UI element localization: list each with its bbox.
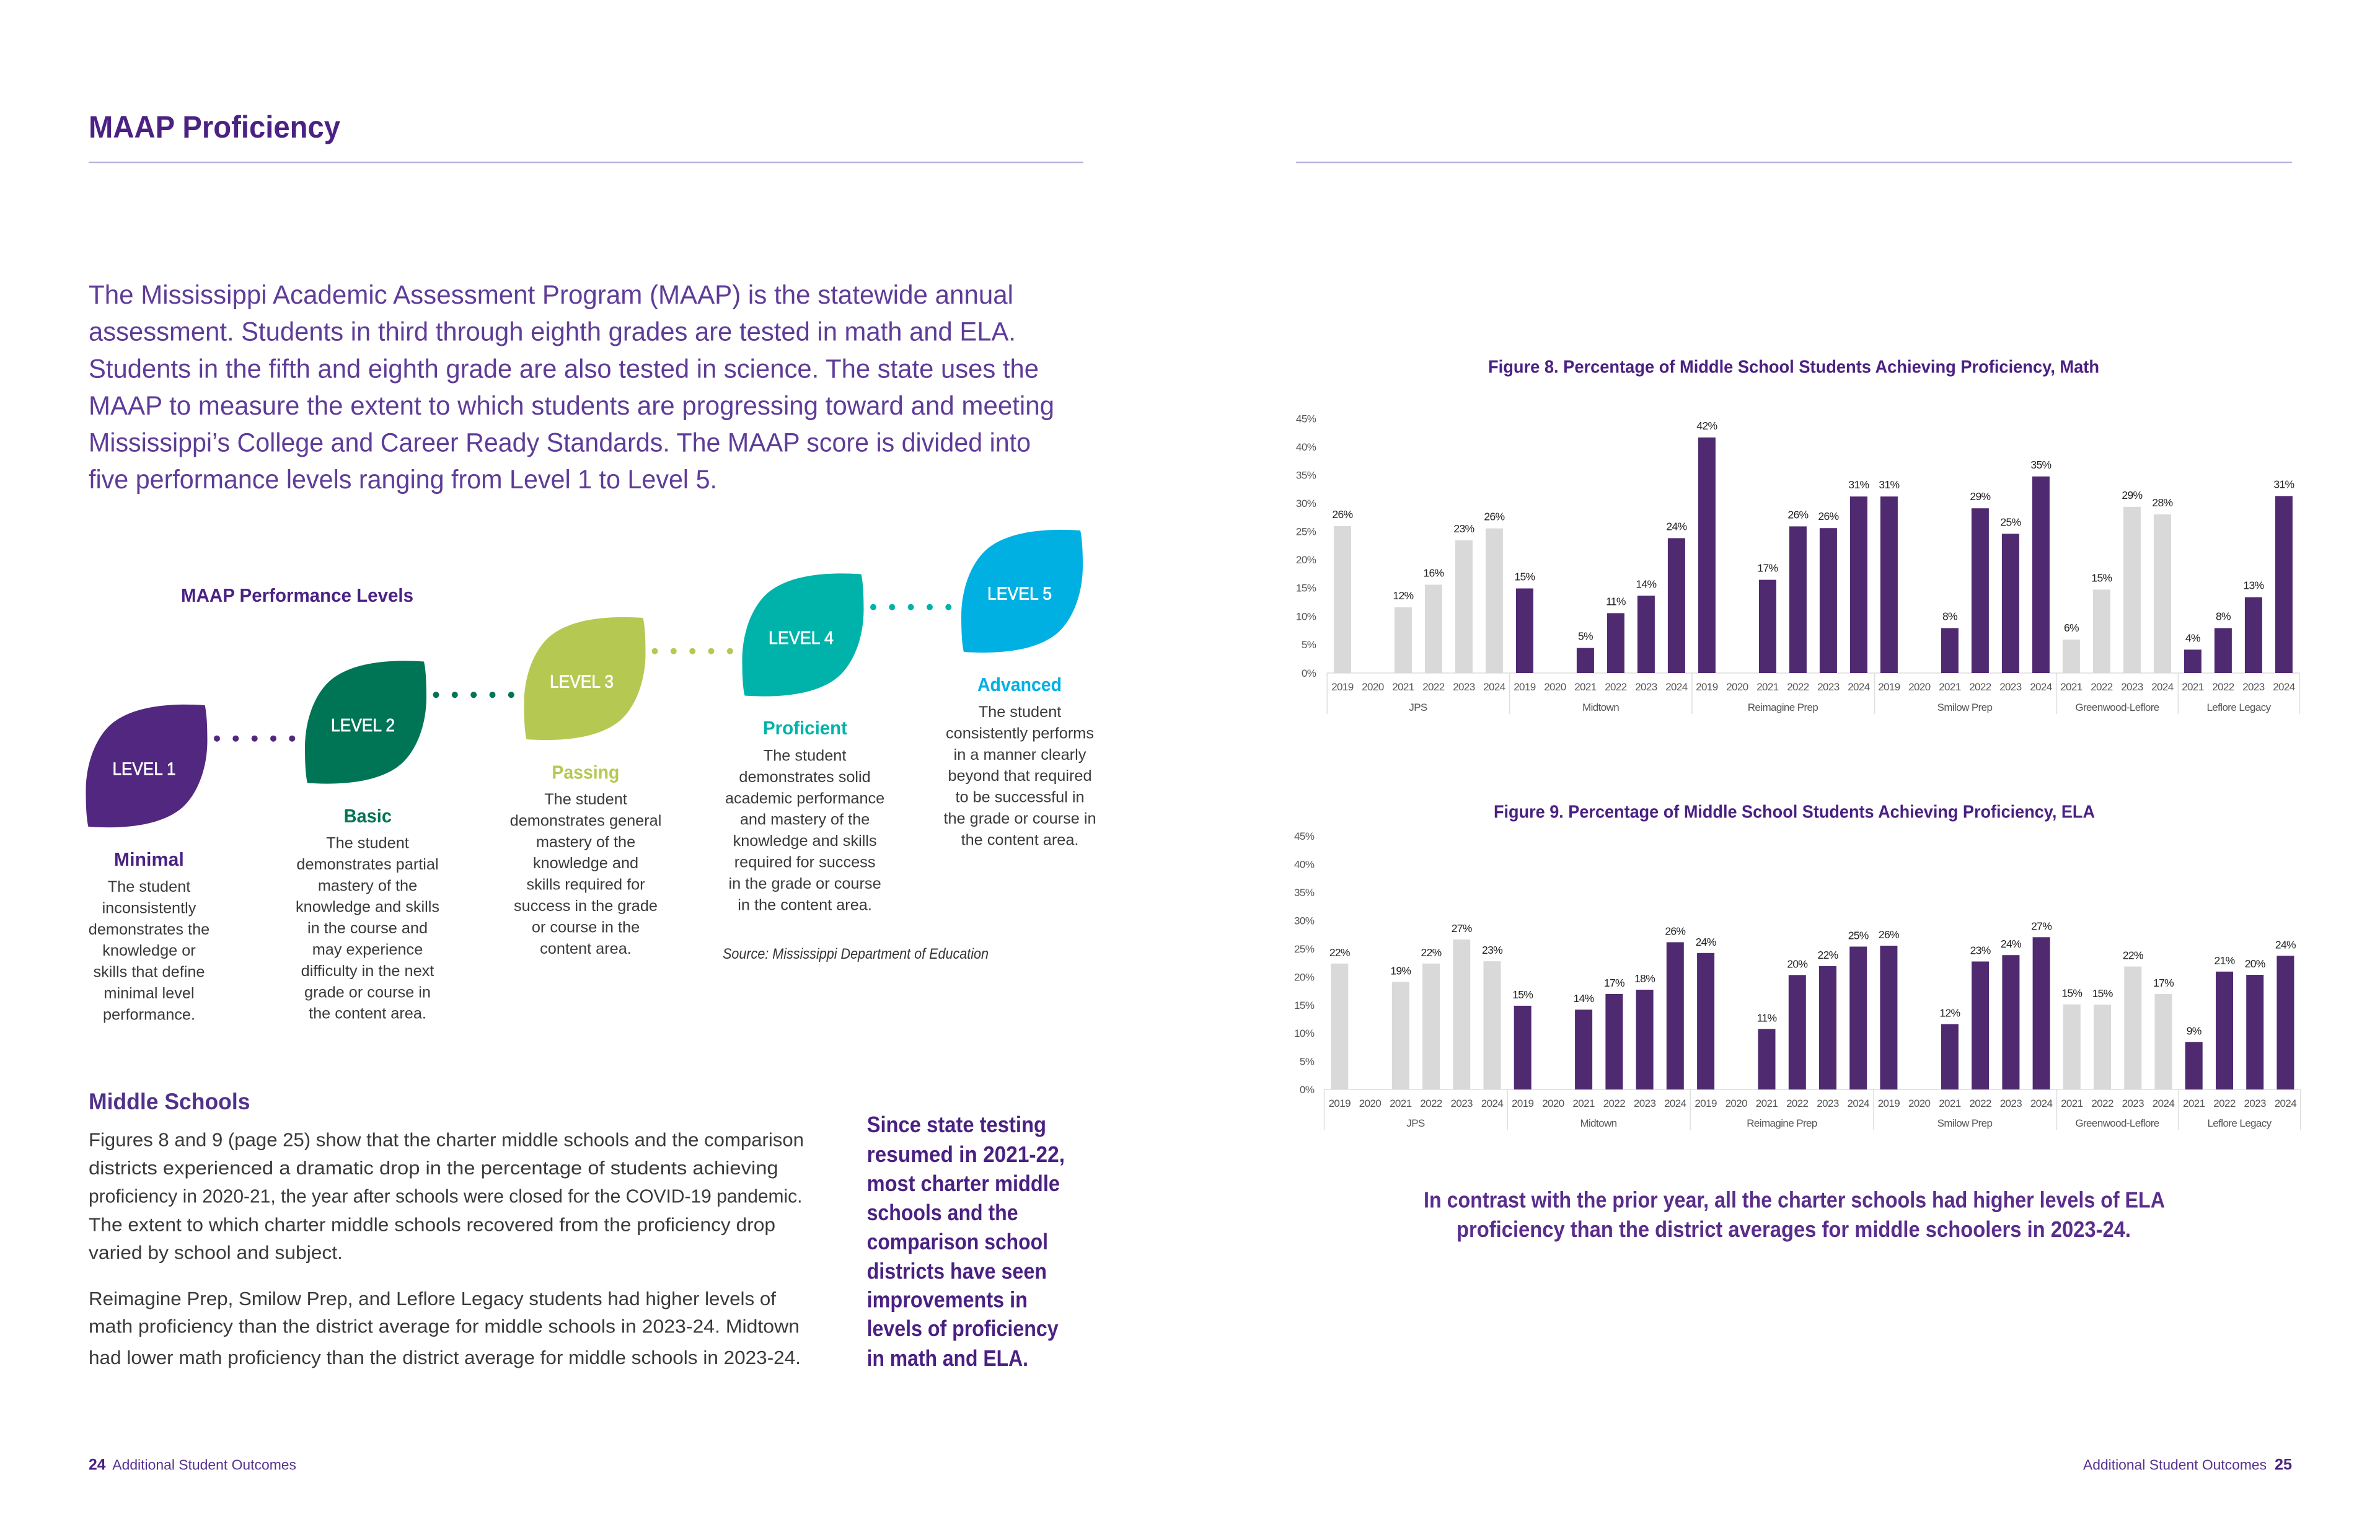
group: Midtown: 15%: [1514, 570, 1535, 583]
level 4 description: [725, 747, 884, 913]
level 4 name: Proficient: [763, 717, 847, 739]
footer: page 25: 25: [2275, 1456, 2292, 1474]
level 4 description: required for success: [734, 854, 875, 871]
dotted connector 3 to 4: [652, 648, 733, 654]
group: Smilow Prep: Smilow Prep: [1937, 1117, 1993, 1129]
intro paragraph: [89, 280, 1054, 495]
group: JPS: 12%: [1393, 589, 1413, 602]
group: Greenwood-Leflore: 17%: [2153, 977, 2174, 989]
callout: ELA contrast with prior year: In contrast with the prior year, all the charter schools had higher levels of ELA: [1424, 1187, 2165, 1212]
y axis labels: 45%: [1296, 413, 1316, 425]
group: Midtown: 2024: [1665, 681, 1688, 693]
group: Reimagine Prep: [1695, 930, 1869, 1129]
group: Reimagine Prep: 31%: [1848, 478, 1869, 491]
level 5 description: consistently performs: [946, 724, 1094, 742]
group: Greenwood-Leflore: [2061, 949, 2174, 1129]
group: JPS: JPS: [1409, 702, 1427, 713]
icon: level 3 leaf: [524, 617, 646, 740]
group: JPS: 2024: [1483, 681, 1505, 693]
body text: middle schools paragraph 1: varied by school and subject.: [89, 1241, 343, 1263]
group: Leflore Legacy: 2021: [2183, 1098, 2205, 1109]
level 5 description: the content area.: [961, 831, 1078, 848]
group: Greenwood-Leflore: 29%: [2122, 489, 2142, 501]
group: Midtown: 17%: [1604, 977, 1624, 989]
group: Midtown: 11%: [1606, 595, 1626, 607]
icon: level 5 leaf: [961, 530, 1083, 653]
callout: state testing: Since state testing: [867, 1112, 1046, 1137]
group: JPS: 2023: [1453, 681, 1475, 693]
level 3 description: success in the grade: [514, 897, 658, 915]
group: Reimagine Prep: 2024: [1847, 1098, 1869, 1109]
y axis labels: 35%: [1296, 469, 1316, 481]
y axis labels: 30%: [1294, 915, 1315, 926]
level 3 description: mastery of the: [536, 834, 635, 851]
group: Midtown: [1514, 520, 1688, 713]
group: Greenwood-Leflore: 15%: [2092, 987, 2113, 1000]
body text: middle schools paragraph 2: [89, 1288, 801, 1368]
group: Smilow Prep: 2024: [2030, 1098, 2052, 1109]
y axis labels: 40%: [1294, 859, 1315, 871]
y axis labels: 45%: [1294, 830, 1315, 842]
group: Midtown: 14%: [1636, 578, 1656, 590]
figure 8 title: Figure 8. Percentage of Middle School Students Achieving Proficiency, Math: [1488, 357, 2099, 377]
group: Midtown: 2019: [1512, 1098, 1534, 1109]
group: Leflore Legacy: Leflore Legacy: [2206, 702, 2272, 713]
group: Greenwood-Leflore: 28%: [2152, 496, 2172, 509]
level 2 description: in the course and: [307, 920, 428, 937]
group: JPS: 23%: [1482, 944, 1502, 956]
group: Midtown: 5%: [1578, 630, 1593, 643]
level 1 name: Minimal: [114, 848, 184, 870]
level 1 description: demonstrates the: [89, 921, 209, 938]
callout: ELA contrast with prior year: proficiency than the district averages for middle schoolers in 2023-24.: [1457, 1217, 2131, 1242]
group: JPS: 2021: [1392, 681, 1414, 693]
callout: state testing: resumed in 2021-22,: [867, 1142, 1065, 1167]
body text: middle schools paragraph 1: proficiency in 2020-21, the year after schools were closed for the COVID-19 pandemic.: [89, 1186, 802, 1207]
y axis labels: [1296, 413, 1316, 679]
y axis labels: 20%: [1296, 554, 1316, 566]
group: Midtown: 2021: [1572, 1098, 1595, 1109]
group: JPS: 2020: [1359, 1098, 1381, 1109]
level 3 description: or course in the: [532, 918, 640, 936]
group: JPS: [1329, 922, 1503, 1129]
group: JPS: 2023: [1450, 1098, 1473, 1109]
group: Midtown: 2022: [1605, 681, 1627, 693]
level 5: Advanced: [943, 530, 1096, 848]
group: Midtown: 2021: [1574, 681, 1597, 693]
group: Midtown: [1512, 925, 1686, 1129]
footer: page 24: 24: [89, 1456, 106, 1474]
level 2: Basic: [296, 661, 514, 1023]
group: Reimagine Prep: 11%: [1757, 1011, 1776, 1024]
group: Smilow Prep: 29%: [1970, 490, 1990, 503]
level 4 description: academic performance: [725, 790, 884, 807]
group: Reimagine Prep: 17%: [1757, 562, 1778, 574]
level 1 description: skills that define: [94, 964, 205, 981]
group: Reimagine Prep: 2021: [1756, 1098, 1778, 1109]
level 2 description: grade or course in: [304, 983, 431, 1001]
body text: middle schools paragraph 2: Reimagine Prep, Smilow Prep, and Leflore Legacy students had higher levels of: [89, 1288, 776, 1309]
title: MAAP Proficiency: [89, 110, 340, 144]
y axis labels: 15%: [1294, 1000, 1315, 1011]
level 2 description: [296, 834, 439, 1023]
level 4 description: knowledge and skills: [733, 832, 877, 850]
group: Greenwood-Leflore: 2021: [2060, 681, 2082, 693]
source note: Source: Mississippi Department of Education: [723, 946, 989, 962]
group: Midtown: Midtown: [1582, 702, 1619, 713]
group: Reimagine Prep: 26%: [1818, 510, 1838, 522]
callout: state testing: schools and the: [867, 1200, 1018, 1225]
group: Reimagine Prep: 2023: [1817, 1098, 1839, 1109]
level 5 description: [943, 703, 1096, 848]
level 2 description: may experience: [312, 941, 423, 958]
group: Greenwood-Leflore: 2023: [2121, 681, 2143, 693]
group: Reimagine Prep: 24%: [1696, 936, 1716, 948]
group: Reimagine Prep: 2024: [1848, 681, 1870, 693]
intro paragraph: assessment. Students in third through eighth grades are tested in math and ELA.: [89, 317, 1016, 347]
level 3 description: skills required for: [526, 876, 645, 894]
level 4 description: in the content area.: [738, 896, 872, 913]
intro paragraph: Mississippi’s College and Career Ready Standards. The MAAP score is divided into: [89, 428, 1031, 458]
group: Leflore Legacy: 2023: [2242, 681, 2265, 693]
group: Smilow Prep: 27%: [2031, 920, 2052, 932]
level 3: Passing: [510, 617, 733, 957]
level 3 description: The student: [544, 791, 627, 808]
level 5 description: in a manner clearly: [954, 746, 1086, 763]
level 2 description: knowledge and skills: [296, 899, 439, 916]
group: Reimagine Prep: [1696, 420, 1870, 713]
callout: state testing: districts have seen: [867, 1258, 1047, 1284]
group: Greenwood-Leflore: 15%: [2091, 571, 2112, 584]
group: JPS: 2019: [1329, 1098, 1351, 1109]
group: JPS: 2022: [1420, 1098, 1442, 1109]
group: Smilow Prep: Smilow Prep: [1937, 702, 1993, 713]
group: Reimagine Prep: 2022: [1786, 1098, 1809, 1109]
group: Midtown: 2019: [1514, 681, 1536, 693]
group: Midtown: 2023: [1635, 681, 1657, 693]
group: Smilow Prep: 25%: [2000, 516, 2021, 528]
group: Midtown: 2024: [1664, 1098, 1686, 1109]
figure 9 title: Figure 9. Percentage of Middle School Students Achieving Proficiency, ELA: [1494, 803, 2095, 822]
icon: level 2 leaf: [305, 661, 426, 784]
callout: state testing: levels of proficiency: [867, 1316, 1059, 1341]
group: Midtown: Midtown: [1580, 1117, 1617, 1129]
group: JPS: 16%: [1423, 566, 1443, 579]
group: Reimagine Prep: 2021: [1756, 681, 1779, 693]
level 1: Minimal: [86, 705, 295, 1023]
group: Midtown: 2022: [1603, 1098, 1625, 1109]
group: Greenwood-Leflore: 22%: [2123, 949, 2143, 962]
y axis labels: 0%: [1300, 1084, 1315, 1096]
level 2 name: Basic: [344, 805, 392, 827]
group: Leflore Legacy: 2022: [2213, 1098, 2236, 1109]
level 4 description: and mastery of the: [740, 811, 870, 829]
group: Reimagine Prep: 42%: [1696, 420, 1717, 432]
group: Smilow Prep: 2023: [2000, 1098, 2022, 1109]
group: Smilow Prep: 24%: [2001, 938, 2021, 950]
level 5 description: the grade or course in: [943, 810, 1096, 827]
group: Greenwood-Leflore: 15%: [2061, 987, 2082, 1000]
group: Greenwood-Leflore: [2060, 489, 2174, 713]
group: Smilow Prep: 2019: [1878, 681, 1900, 693]
y axis labels: 10%: [1296, 611, 1316, 622]
group: JPS: 2021: [1390, 1098, 1412, 1109]
group: Smilow Prep: 31%: [1879, 478, 1899, 491]
level 4 description: The student: [764, 747, 846, 765]
group: Greenwood-Leflore: 2021: [2061, 1098, 2083, 1109]
chart: figure 9 ELA proficiency bar chart: [1294, 830, 2301, 1130]
level 3 name: Passing: [552, 762, 619, 783]
group: JPS: 2024: [1481, 1098, 1503, 1109]
group: Smilow Prep: [1878, 459, 2052, 713]
y axis labels: 20%: [1294, 971, 1315, 983]
level 4 label: LEVEL 4: [769, 628, 834, 648]
group: Reimagine Prep: 2020: [1726, 681, 1748, 693]
level 1 description: knowledge or: [102, 942, 196, 959]
level 1 description: inconsistently: [102, 899, 196, 917]
level 1 label: LEVEL 1: [113, 760, 176, 780]
group: Smilow Prep: 2022: [1969, 1098, 1991, 1109]
y axis labels: 15%: [1296, 583, 1316, 594]
group: Smilow Prep: 23%: [1970, 944, 1991, 957]
body text: middle schools paragraph 1: The extent to which charter middle schools recovered from the proficiency drop: [89, 1214, 775, 1236]
icon: level 4 leaf: [743, 573, 864, 697]
dotted connector 4 to 5: [870, 604, 951, 610]
level 5 description: beyond that required: [948, 767, 1092, 785]
group: Reimagine Prep: 2023: [1817, 681, 1840, 693]
group: Leflore Legacy: 4%: [2185, 631, 2200, 644]
level 5 name: Advanced: [977, 674, 1062, 695]
group: Midtown: 15%: [1512, 988, 1533, 1001]
callout: state testing: improvements in: [867, 1287, 1028, 1312]
level 1 description: The student: [108, 878, 190, 895]
y axis labels: [1294, 830, 1315, 1096]
level 3 description: content area.: [540, 940, 632, 957]
group: JPS: 22%: [1329, 946, 1350, 959]
group: Smilow Prep: 2024: [2030, 681, 2052, 693]
group: Reimagine Prep: 26%: [1787, 508, 1808, 521]
group: Reimagine Prep: 2022: [1787, 681, 1809, 693]
group: Reimagine Prep: Reimagine Prep: [1748, 702, 1818, 713]
group: Smilow Prep: 2021: [1939, 1098, 1961, 1109]
group: Leflore Legacy: 2021: [2182, 681, 2204, 693]
group: Reimagine Prep: 2019: [1695, 1098, 1717, 1109]
body text: middle schools paragraph 1: districts experienced a dramatic drop in the percentage of students achieving: [89, 1157, 778, 1179]
level 5 description: The student: [979, 703, 1061, 721]
intro paragraph: Students in the fifth and eighth grade are also tested in science. The state uses the: [89, 354, 1039, 384]
y axis labels: 5%: [1302, 639, 1316, 651]
group: Midtown: 2020: [1542, 1098, 1564, 1109]
group: Midtown: 26%: [1665, 925, 1685, 937]
group: Greenwood-Leflore: 2022: [2091, 1098, 2113, 1109]
level 3 description: [510, 791, 661, 957]
body text: middle schools paragraph 2: math proficiency than the district average for middle schools in 2023-24. Midtown: [89, 1315, 800, 1337]
group: Greenwood-Leflore: 2022: [2091, 681, 2113, 693]
y axis labels: 35%: [1294, 887, 1315, 899]
group: Reimagine Prep: 2020: [1726, 1098, 1747, 1109]
y axis labels: 30%: [1296, 498, 1316, 509]
group: Midtown: 14%: [1574, 992, 1594, 1005]
callout: state testing: in math and ELA.: [867, 1345, 1028, 1371]
level 1 description: performance.: [103, 1006, 195, 1023]
y axis labels: 5%: [1300, 1055, 1315, 1067]
group: Leflore Legacy: [2182, 478, 2295, 713]
group: Leflore Legacy: 13%: [2243, 579, 2263, 592]
group: Greenwood-Leflore: 2024: [2153, 1098, 2174, 1109]
group: Midtown: 18%: [1634, 972, 1655, 985]
group: Reimagine Prep: 22%: [1818, 949, 1838, 961]
group: JPS: [1331, 508, 1505, 713]
group: JPS: 22%: [1421, 946, 1442, 959]
group: Leflore Legacy: 31%: [2273, 478, 2294, 490]
group: Leflore Legacy: 20%: [2245, 957, 2265, 970]
group: JPS: 2022: [1422, 681, 1445, 693]
group: Smilow Prep: 12%: [1939, 1006, 1960, 1019]
group: Smilow Prep: 8%: [1942, 610, 1957, 622]
group: JPS: 26%: [1484, 511, 1504, 523]
level 5 label: LEVEL 5: [987, 584, 1052, 604]
group: Greenwood-Leflore: Greenwood-Leflore: [2075, 702, 2159, 713]
group: JPS: JPS: [1406, 1117, 1425, 1129]
group: JPS: 2019: [1331, 681, 1354, 693]
group: Leflore Legacy: 21%: [2215, 954, 2235, 967]
level 2 description: demonstrates partial: [296, 856, 439, 873]
group: Midtown: 24%: [1666, 520, 1686, 532]
dotted connector 2 to 3: [433, 692, 514, 698]
group: Greenwood-Leflore: 2024: [2151, 681, 2174, 693]
y axis labels: 25%: [1294, 943, 1315, 955]
body text: middle schools paragraph 2: had lower math proficiency than the district average for middle schools in 2023-24.: [89, 1347, 801, 1368]
level 2 label: LEVEL 2: [331, 716, 395, 736]
intro paragraph: MAAP to measure the extent to which students are progressing toward and meeting: [89, 391, 1054, 421]
group: Leflore Legacy: 2023: [2244, 1098, 2266, 1109]
footer: page 24: Additional Student Outcomes: [112, 1456, 296, 1472]
chart: figure 8 math proficiency bar chart: [1296, 413, 2299, 714]
group: Leflore Legacy: 24%: [2275, 938, 2296, 951]
intro paragraph: five performance levels ranging from Level 1 to Level 5.: [89, 465, 717, 495]
group: Reimagine Prep: 2019: [1696, 681, 1718, 693]
level 4 description: demonstrates solid: [739, 768, 871, 786]
group: JPS: 2020: [1362, 681, 1384, 693]
group: Smilow Prep: 2019: [1878, 1098, 1900, 1109]
y axis labels: 25%: [1296, 526, 1316, 537]
group: JPS: 26%: [1332, 508, 1352, 521]
panel: MAAP performance levels: [86, 530, 1096, 1023]
level 2 description: The student: [326, 834, 409, 851]
intro paragraph: The Mississippi Academic Assessment Program (MAAP) is the statewide annual: [89, 280, 1013, 310]
group: Smilow Prep: [1878, 920, 2052, 1129]
heading: Middle Schools: Middle Schools: [89, 1089, 250, 1114]
y axis labels: 10%: [1294, 1027, 1315, 1039]
level 4 description: in the grade or course: [729, 875, 881, 892]
level 2 description: difficulty in the next: [301, 962, 434, 980]
level 1 description: minimal level: [104, 985, 195, 1002]
group: Midtown: 2020: [1544, 681, 1566, 693]
body text: middle schools paragraph 1: [89, 1129, 804, 1263]
group: Greenwood-Leflore: 2023: [2122, 1098, 2144, 1109]
group: Reimagine Prep: 25%: [1848, 930, 1869, 942]
group: Reimagine Prep: 20%: [1787, 957, 1807, 970]
body text: middle schools paragraph 1: Figures 8 and 9 (page 25) show that the charter middle schools and the comparison: [89, 1129, 804, 1151]
level 2 description: the content area.: [309, 1005, 426, 1023]
group: JPS: 19%: [1390, 964, 1411, 977]
group: Smilow Prep: 26%: [1879, 928, 1899, 941]
dotted connector 1 to 2: [214, 736, 295, 742]
group: Smilow Prep: 2020: [1908, 681, 1931, 693]
level 3 description: demonstrates general: [510, 812, 661, 829]
group: Midtown: 2023: [1634, 1098, 1655, 1109]
group: Leflore Legacy: [2183, 938, 2296, 1129]
level 1 description: [89, 878, 209, 1023]
group: Greenwood-Leflore: 6%: [2064, 622, 2079, 634]
callout: state testing: comparison school: [867, 1229, 1048, 1254]
group: Leflore Legacy: 2024: [2273, 681, 2295, 693]
level 5 description: to be successful in: [955, 789, 1085, 806]
group: Leflore Legacy: 2022: [2212, 681, 2234, 693]
level 3 label: LEVEL 3: [550, 672, 614, 692]
footer: page 25: Additional Student Outcomes: [2083, 1456, 2267, 1472]
group: Smilow Prep: 2021: [1939, 681, 1961, 693]
y axis labels: 0%: [1302, 667, 1316, 679]
callout: state testing: most charter middle: [867, 1171, 1060, 1196]
heading: MAAP Performance Levels: MAAP Performance Levels: [181, 584, 413, 606]
level 4: Proficient: [725, 573, 951, 913]
group: Greenwood-Leflore: Greenwood-Leflore: [2075, 1117, 2159, 1129]
group: JPS: 27%: [1452, 922, 1472, 935]
group: Smilow Prep: 2023: [1999, 681, 2022, 693]
group: Smilow Prep: 35%: [2030, 459, 2051, 471]
level 3 description: knowledge and: [533, 855, 638, 872]
group: Leflore Legacy: 2024: [2275, 1098, 2296, 1109]
group: Smilow Prep: 2022: [1969, 681, 1991, 693]
callout: state testing: [867, 1112, 1065, 1371]
callout: ELA contrast with prior year: [1424, 1187, 2165, 1242]
y axis labels: 40%: [1296, 441, 1316, 453]
group: Leflore Legacy: 8%: [2216, 610, 2231, 622]
group: Reimagine Prep: Reimagine Prep: [1747, 1117, 1817, 1129]
group: Leflore Legacy: Leflore Legacy: [2207, 1117, 2272, 1129]
level 2 description: mastery of the: [318, 877, 417, 894]
group: Smilow Prep: 2020: [1908, 1098, 1931, 1109]
group: Leflore Legacy: 9%: [2187, 1024, 2202, 1037]
icon: level 1 leaf: [86, 705, 207, 827]
group: JPS: 23%: [1453, 522, 1474, 535]
